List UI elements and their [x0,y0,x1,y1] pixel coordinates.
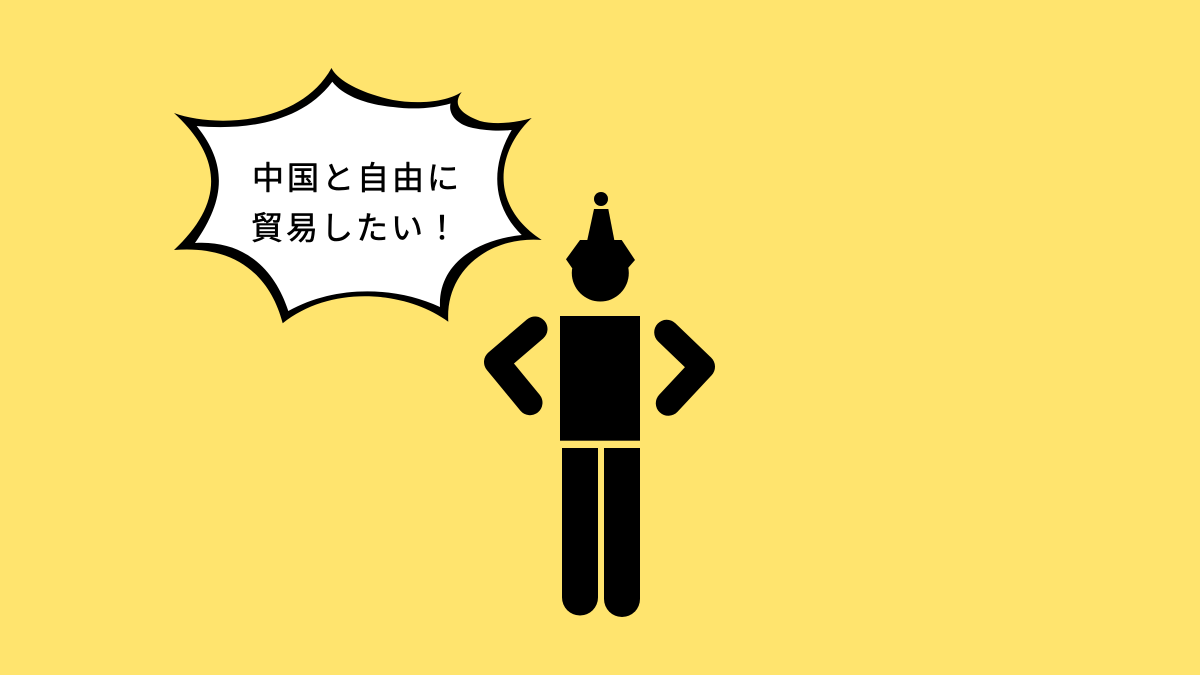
left leg [562,448,598,615]
right leg [604,448,640,617]
bubble text: 中国と自由に [252,160,462,196]
hat cone [587,209,614,240]
head [572,244,629,302]
bubble outline [174,68,542,323]
speech bubble [174,68,542,323]
hat brim [566,240,635,268]
bubble fill [195,82,522,311]
left arm [496,329,535,403]
bubble text [251,160,462,246]
figure: person with hands on hips [496,192,702,617]
bubble text: 貿易したい！ [251,210,461,246]
right arm [667,332,702,403]
hat ball [594,192,608,206]
body [560,316,640,441]
